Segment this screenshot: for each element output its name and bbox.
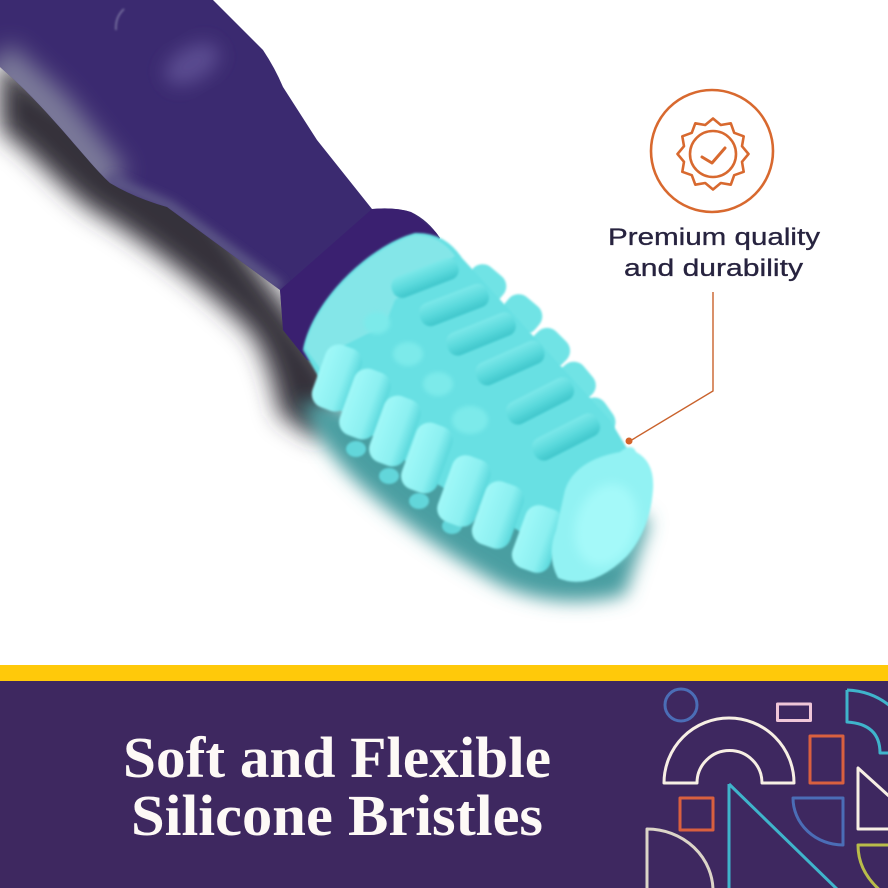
heading line 2: Silicone Bristles — [131, 783, 543, 848]
callout: premium quality — [608, 90, 820, 444]
handle collar — [280, 208, 452, 365]
orange square — [680, 798, 713, 830]
leader line — [630, 292, 713, 441]
decorative outlined shapes — [647, 689, 888, 888]
banner panel — [0, 681, 888, 888]
product photo: silicone brush head — [0, 0, 653, 602]
leader dot — [626, 438, 632, 444]
fin nubs — [346, 441, 462, 534]
handle edge sheen — [0, 60, 110, 185]
handle scratch — [116, 9, 124, 30]
end cap glow — [564, 476, 648, 574]
orange rectangle — [810, 736, 843, 783]
callout text line 1: Premium quality — [608, 224, 820, 251]
callout text line 2: and durability — [624, 255, 803, 282]
neck sheen — [110, 180, 280, 288]
base disc face — [305, 235, 455, 375]
ridges — [388, 255, 604, 464]
teal quarter arc — [847, 690, 888, 753]
spine bumps — [364, 312, 488, 434]
handle highlight — [162, 38, 222, 90]
heading line 1: Soft and Flexible — [123, 725, 551, 790]
end cap — [551, 447, 653, 582]
silicone body — [303, 233, 640, 560]
pink rectangle — [778, 704, 810, 720]
yellow stripe — [0, 665, 888, 681]
icon: quality badge — [651, 90, 773, 212]
olive quarter — [858, 845, 888, 888]
circle — [665, 689, 697, 721]
beige half round — [647, 829, 713, 888]
far side fin tips — [460, 259, 621, 444]
handle — [0, 0, 460, 370]
teal triangle — [729, 784, 840, 888]
cream triangle — [858, 768, 888, 829]
bristle shadow — [300, 400, 650, 602]
cream arch — [664, 718, 794, 783]
blue quarter — [793, 798, 843, 845]
handle shadow — [0, 60, 340, 440]
lower fins — [308, 340, 568, 577]
